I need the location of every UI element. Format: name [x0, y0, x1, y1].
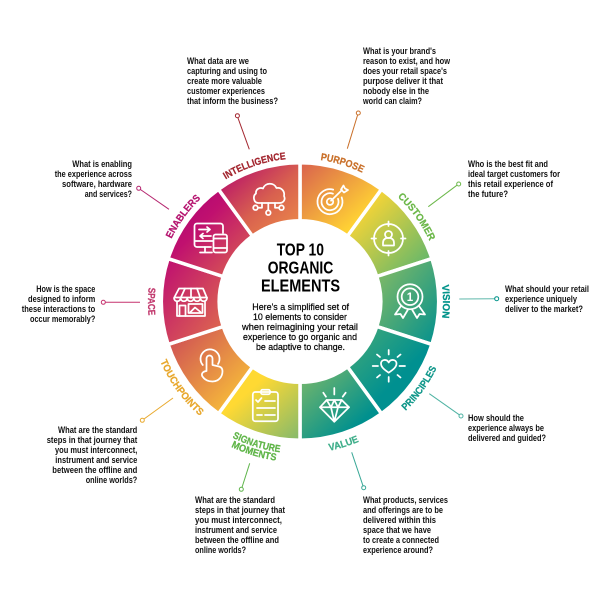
- text: enablers question: What is enabling: [72, 159, 132, 169]
- label: principles: PRINCIPLES: [401, 366, 436, 411]
- text: space question: designed to inform: [28, 294, 95, 304]
- text: touchpoints question: [47, 425, 137, 485]
- text: signature moments question: you must interconnect,: [195, 515, 282, 525]
- text: intelligence question: capturing and using to: [187, 66, 267, 76]
- text: customer question: Who is the best fit and: [468, 159, 548, 169]
- label: customer: CUSTOMER: [398, 193, 435, 241]
- label: signature moments: SIGNATURE: [233, 432, 281, 452]
- text: signature moments question: What are the standard: [195, 495, 275, 505]
- text: purpose question: does your retail space's: [363, 66, 447, 76]
- segment: signature moments: [218, 367, 300, 440]
- text: enablers question: software, hardware: [62, 179, 132, 189]
- text: space question: these interactions to: [22, 304, 96, 314]
- center description: [241, 302, 358, 352]
- text: purpose question: reason to exist, and how: [363, 56, 451, 66]
- text: purpose question: [362, 46, 451, 106]
- text: signature moments question: online worlds?: [195, 545, 246, 555]
- text: principles question: experience always be: [468, 423, 544, 433]
- text: space question: How is the space: [36, 284, 95, 294]
- connector: enablers: [137, 186, 169, 209]
- text: value question: space that we have: [363, 525, 431, 535]
- text: purpose question: What is your brand's: [363, 46, 436, 56]
- segment: space: [161, 259, 223, 344]
- text: touchpoints question: steps in that journey that: [47, 435, 137, 445]
- title: TOP 10: [277, 240, 324, 260]
- segment: value: [300, 367, 382, 440]
- segment: purpose: [300, 163, 382, 236]
- connector: intelligence: [235, 114, 249, 149]
- segment: customer: [348, 189, 432, 276]
- segment: intelligence: [218, 163, 300, 236]
- text: principles question: delivered and guided?: [468, 433, 546, 443]
- connector: customer: [428, 182, 461, 207]
- icon: target with arrow: [317, 186, 348, 214]
- text: customer question: ideal target customers for: [468, 169, 560, 179]
- segment: enablers: [168, 189, 252, 276]
- text: purpose question: world can claim?: [362, 96, 422, 106]
- connector: signature moments: [239, 463, 250, 491]
- title: ELEMENTS: [261, 276, 340, 296]
- center description: 10 elements to consider: [253, 312, 347, 322]
- ring of ten segments: [161, 163, 439, 440]
- icon: storefront: [174, 288, 207, 316]
- label: value: VALUE: [328, 435, 359, 450]
- text: value question: [363, 495, 448, 555]
- text: value question: experience around?: [363, 545, 433, 555]
- text: signature moments question: steps in that journey that: [195, 505, 285, 515]
- text: space question: occur memorably?: [30, 314, 95, 324]
- center description: be adaptive to change.: [256, 342, 345, 352]
- label: signature moments: MOMENTS: [231, 440, 276, 460]
- text: principles question: How should the: [468, 413, 524, 423]
- text: vision question: experience uniquely: [505, 294, 577, 304]
- icon: person in crosshair: [372, 222, 406, 256]
- text: enablers question: and services?: [85, 189, 132, 199]
- text: signature moments question: [195, 495, 285, 555]
- icon: award rosette: 1: [407, 292, 414, 304]
- text: customer question: this retail experience of: [468, 179, 554, 189]
- text: purpose question: nobody else in the: [363, 86, 429, 96]
- text: principles question: [468, 413, 546, 443]
- title: [261, 240, 340, 296]
- text: enablers question: [55, 159, 132, 199]
- text: space question: [22, 284, 96, 324]
- label: purpose: PURPOSE: [320, 153, 365, 173]
- text: touchpoints question: between the offline and: [52, 465, 137, 475]
- text: value question: and offerings are to be: [363, 505, 443, 515]
- icon: touch hand: [201, 349, 222, 382]
- title: ORGANIC: [268, 258, 333, 278]
- text: touchpoints question: What are the standard: [58, 425, 137, 435]
- text: intelligence question: [187, 56, 278, 106]
- label: touchpoints: TOUCHPOINTS: [161, 358, 204, 415]
- text: enablers question: the experience across: [55, 169, 132, 179]
- icon: clipboard checklist: [253, 390, 278, 421]
- connector: space: [101, 300, 140, 304]
- text: touchpoints question: you must interconnect,: [55, 445, 137, 455]
- text: value question: delivered within this: [363, 515, 436, 525]
- text: signature moments question: between the offline and: [195, 535, 279, 545]
- segment: vision: [377, 259, 439, 344]
- segment: touchpoints: [168, 326, 252, 414]
- text: vision question: [505, 284, 589, 314]
- label: enablers: ENABLERS: [165, 194, 200, 238]
- connector: purpose: [347, 111, 360, 149]
- text: customer question: the future?: [468, 189, 508, 199]
- center description: when reimagining your retail: [241, 322, 358, 332]
- segment: principles: [348, 326, 432, 414]
- text: vision question: deliver to the market?: [505, 304, 583, 314]
- connector: value: [352, 452, 366, 490]
- label: space: SPACE: [148, 288, 156, 316]
- text: intelligence question: that inform the business?: [187, 96, 278, 106]
- connector: touchpoints: [140, 398, 173, 422]
- center description: experience to go organic and: [243, 332, 357, 342]
- icon: award rosette: [395, 284, 425, 318]
- label: intelligence: INTELLIGENCE: [222, 152, 286, 180]
- text: value question: What products, services: [363, 495, 448, 505]
- center description: Here's a simplified set of: [252, 302, 349, 312]
- connector: principles: [429, 394, 463, 418]
- text: touchpoints question: instrument and service: [55, 455, 137, 465]
- text: intelligence question: create more valuable: [187, 76, 262, 86]
- connector: vision: [459, 297, 499, 301]
- text: signature moments question: instrument and service: [195, 525, 277, 535]
- text: customer question: [468, 159, 560, 199]
- text: intelligence question: customer experiences: [187, 86, 265, 96]
- icon: cloud network: [253, 184, 285, 215]
- text: purpose question: purpose deliver it that: [363, 76, 443, 86]
- text: touchpoints question: online worlds?: [86, 475, 137, 485]
- icon: heart with rays: [373, 350, 405, 382]
- text: value question: to create a connected: [363, 535, 439, 545]
- icon: computer and tablet: [194, 224, 227, 252]
- icon: diamond: [320, 388, 349, 422]
- text: intelligence question: What data are we: [187, 56, 249, 66]
- label: vision: VISION: [442, 284, 450, 318]
